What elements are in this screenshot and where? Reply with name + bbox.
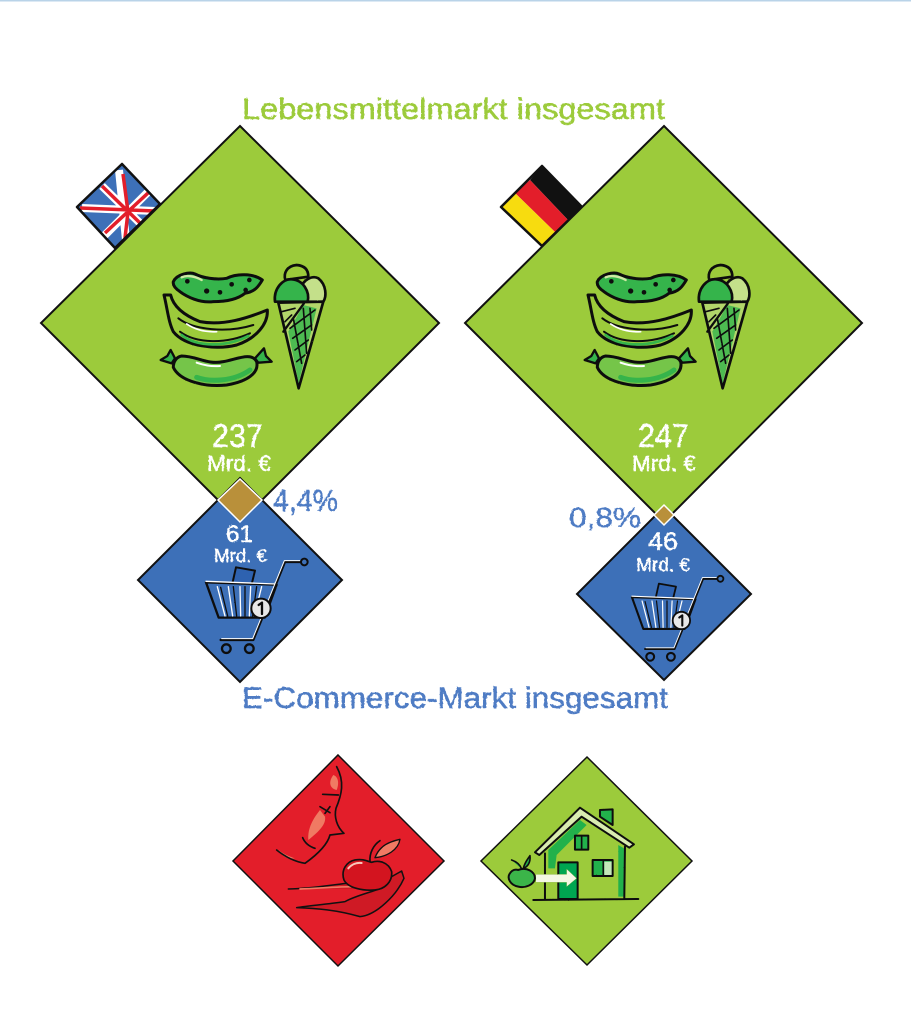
panel: Germany e-commerce diamond xyxy=(577,507,751,680)
flag: United Kingdom xyxy=(77,164,160,248)
title: Lebensmittelmarkt insgesamt: Lebensmittelmarkt insgesamt xyxy=(242,93,666,126)
icon: face xyxy=(277,767,344,863)
icon: groceries UK xyxy=(161,265,325,388)
value: UK e-commerce xyxy=(214,521,267,566)
value: UK e-commerce: Mrd. € xyxy=(214,546,267,566)
share: UK 4,4%: 4,4% xyxy=(273,483,338,518)
value: UK grocery market: 237 xyxy=(212,418,263,454)
value: UK grocery market: Mrd. € xyxy=(207,451,271,476)
overlap diamond Germany xyxy=(654,505,674,525)
value: UK grocery market xyxy=(207,418,271,476)
overlap diamond UK xyxy=(218,479,262,522)
panel: UK grocery market diamond xyxy=(41,126,439,522)
icon: apple with arrow xyxy=(509,856,577,887)
value: Germany e-commerce: Mrd. € xyxy=(636,555,690,575)
value: Germany e-commerce xyxy=(636,528,690,575)
panel: UK e-commerce diamond xyxy=(138,478,342,682)
value: Germany grocery market: Mrd. € xyxy=(632,451,696,476)
icon: apple in hand xyxy=(288,839,404,917)
panel: green diamond with house xyxy=(481,757,692,965)
top rule xyxy=(0,0,911,2)
share: Germany 0,8%: 0,8% xyxy=(569,502,641,533)
value: UK e-commerce: 61 xyxy=(226,521,253,548)
flag: Germany xyxy=(501,166,582,246)
title: E-Commerce-Markt insgesamt: E-Commerce-Markt insgesamt xyxy=(242,682,669,715)
value: Germany e-commerce: 46 xyxy=(648,528,678,556)
panel: Germany grocery market diamond xyxy=(465,126,862,522)
value: Germany grocery market: 247 xyxy=(638,418,689,454)
icon: shopping cart Germany xyxy=(632,576,723,661)
value: Germany grocery market xyxy=(632,418,696,476)
icon: groceries Germany xyxy=(585,265,749,388)
icon: house xyxy=(533,808,638,900)
icon: shopping cart UK xyxy=(206,559,308,653)
panel: red diamond with face and apple xyxy=(233,755,444,966)
